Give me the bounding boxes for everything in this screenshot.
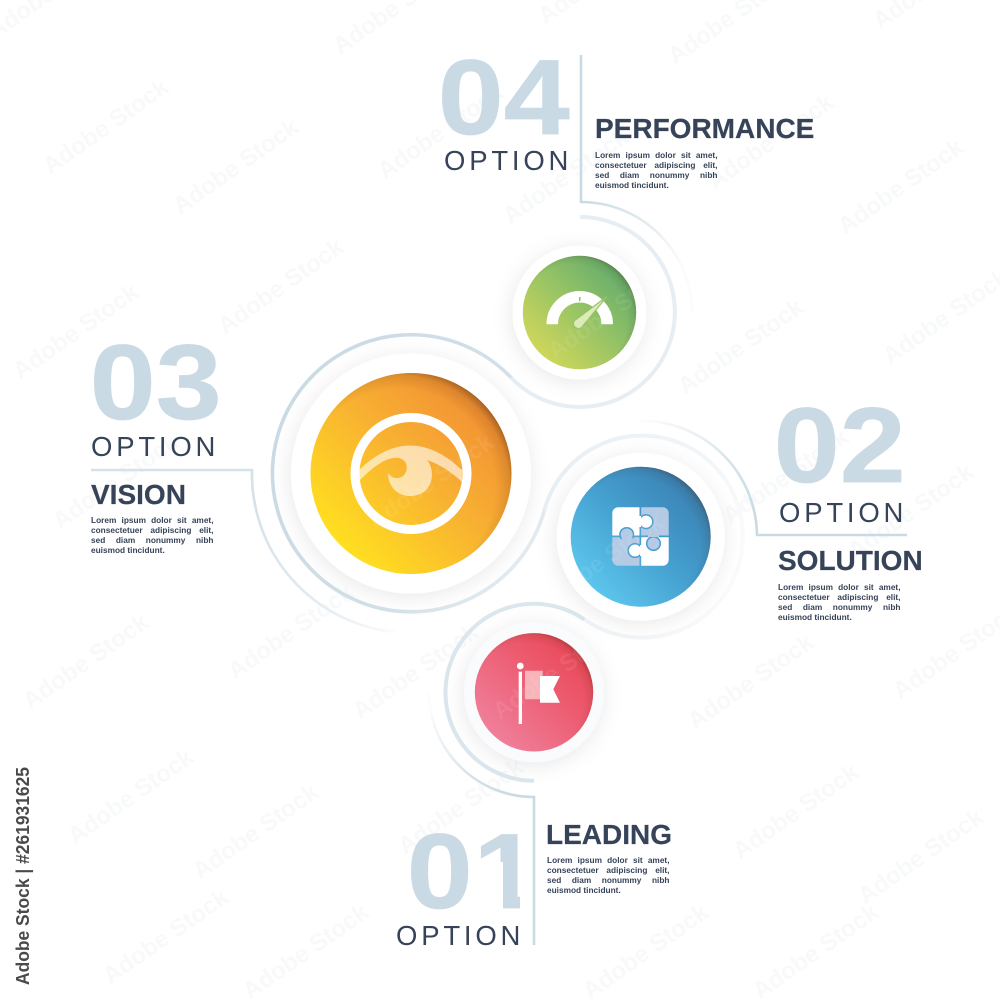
watermark pattern: Adobe Stock	[853, 803, 989, 910]
option label 04: OPTION	[444, 145, 572, 176]
watermark pattern: Adobe Stock	[498, 123, 634, 230]
body text 02: Lorem ipsum dolor sit amet,	[778, 582, 900, 592]
watermark pattern: Adobe Stock	[63, 743, 199, 850]
number 01: 01	[407, 811, 539, 931]
icon: speedometer	[552, 296, 607, 329]
ring around orange circle	[272, 335, 544, 612]
watermark overlay on circles	[363, 258, 679, 725]
option 03: vision	[90, 322, 222, 556]
watermark pattern: Adobe Stock	[393, 753, 529, 860]
body text 01	[547, 855, 670, 896]
icon: eye	[355, 418, 467, 530]
icon: puzzle	[612, 507, 669, 566]
watermark pattern: Adobe Stock	[703, 88, 839, 195]
watermark overlay on circles: Adobe Stock	[488, 618, 624, 725]
watermark pattern: Adobe Stock	[843, 458, 979, 565]
watermark pattern: Adobe Stock	[673, 293, 809, 400]
watermark pattern: Adobe Stock	[168, 113, 304, 220]
watermark pattern: Adobe Stock	[18, 608, 154, 715]
option label 03: OPTION	[91, 431, 219, 462]
watermark pattern: Adobe Stock	[38, 73, 174, 180]
watermark pattern: Adobe Stock	[833, 133, 969, 240]
heading: leading: LEADING	[546, 819, 672, 850]
node: performance green circle	[512, 246, 646, 380]
node: solution blue circle	[557, 453, 725, 621]
watermark pattern: Adobe Stock	[188, 778, 324, 885]
body text 03	[91, 515, 214, 556]
ring around blue circle	[544, 436, 743, 638]
connector thin line: option 02	[641, 421, 907, 535]
body text 01: sed diam nonummy nibh	[547, 875, 670, 885]
connector thin line: option 01	[429, 692, 534, 945]
watermark pattern: Adobe Stock	[683, 628, 819, 735]
body text 04	[595, 150, 718, 191]
body text 03: consectetuer adipiscing elit,	[91, 525, 214, 535]
option label 01: OPTION	[396, 920, 524, 951]
body text 01: consectetuer adipiscing elit,	[547, 865, 670, 875]
body text 03: euismod tincidunt.	[91, 545, 165, 555]
heading: vision: VISION	[91, 479, 186, 510]
body text 02: euismod tincidunt.	[778, 612, 852, 622]
connector thin line: option 03	[91, 470, 395, 632]
number 04: 04	[438, 37, 570, 157]
watermark pattern: Adobe Stock	[223, 578, 359, 685]
watermark overlay on circles: Adobe Stock	[363, 428, 499, 535]
ring around red circle	[445, 604, 584, 781]
number 03: 03	[90, 322, 222, 442]
heading: solution: SOLUTION	[778, 545, 923, 576]
option 02: solution	[774, 385, 923, 623]
body text 03: Lorem ipsum dolor sit amet,	[91, 515, 214, 525]
option 01: leading	[397, 824, 670, 946]
watermark pattern: Adobe Stock	[728, 758, 864, 865]
watermark pattern: Adobe Stock	[48, 428, 184, 535]
watermark pattern: Adobe Stock	[718, 423, 854, 530]
body text 03: sed diam nonummy nibh	[91, 535, 214, 545]
option 04: performance	[438, 37, 814, 191]
stock credit vertical text: Adobe Stock | #261931625	[13, 767, 33, 985]
body text 04: Lorem ipsum dolor sit amet,	[595, 150, 718, 160]
node: vision orange circle	[291, 354, 531, 594]
watermark pattern: Adobe Stock	[348, 618, 484, 725]
heading: performance: PERFORMANCE	[595, 113, 814, 144]
watermark pattern: Adobe Stock	[98, 883, 234, 990]
connector thin line: option 04	[581, 55, 692, 313]
option label 02: OPTION	[779, 497, 907, 528]
body text 02	[778, 582, 900, 623]
watermark pattern: Adobe Stock	[8, 278, 144, 385]
body text 02: consectetuer adipiscing elit,	[778, 592, 900, 602]
watermark pattern: Adobe Stock	[213, 233, 349, 340]
body text 04: euismod tincidunt.	[595, 180, 669, 190]
body text 01: Lorem ipsum dolor sit amet,	[547, 855, 670, 865]
ring around green circle	[511, 217, 675, 407]
watermark overlay on circles: Adobe Stock	[543, 258, 679, 365]
node: leading red circle	[464, 622, 604, 762]
watermark overlay on circles: Adobe Stock	[533, 508, 669, 615]
body text 04: consectetuer adipiscing elit,	[595, 160, 718, 170]
number 02: 02	[774, 385, 906, 505]
watermark pattern: Adobe Stock	[373, 78, 509, 185]
body text 02: sed diam nonummy nibh	[778, 602, 900, 612]
body text 04: sed diam nonummy nibh	[595, 170, 718, 180]
body text 01: euismod tincidunt.	[547, 885, 621, 895]
icon: flag	[517, 663, 560, 724]
